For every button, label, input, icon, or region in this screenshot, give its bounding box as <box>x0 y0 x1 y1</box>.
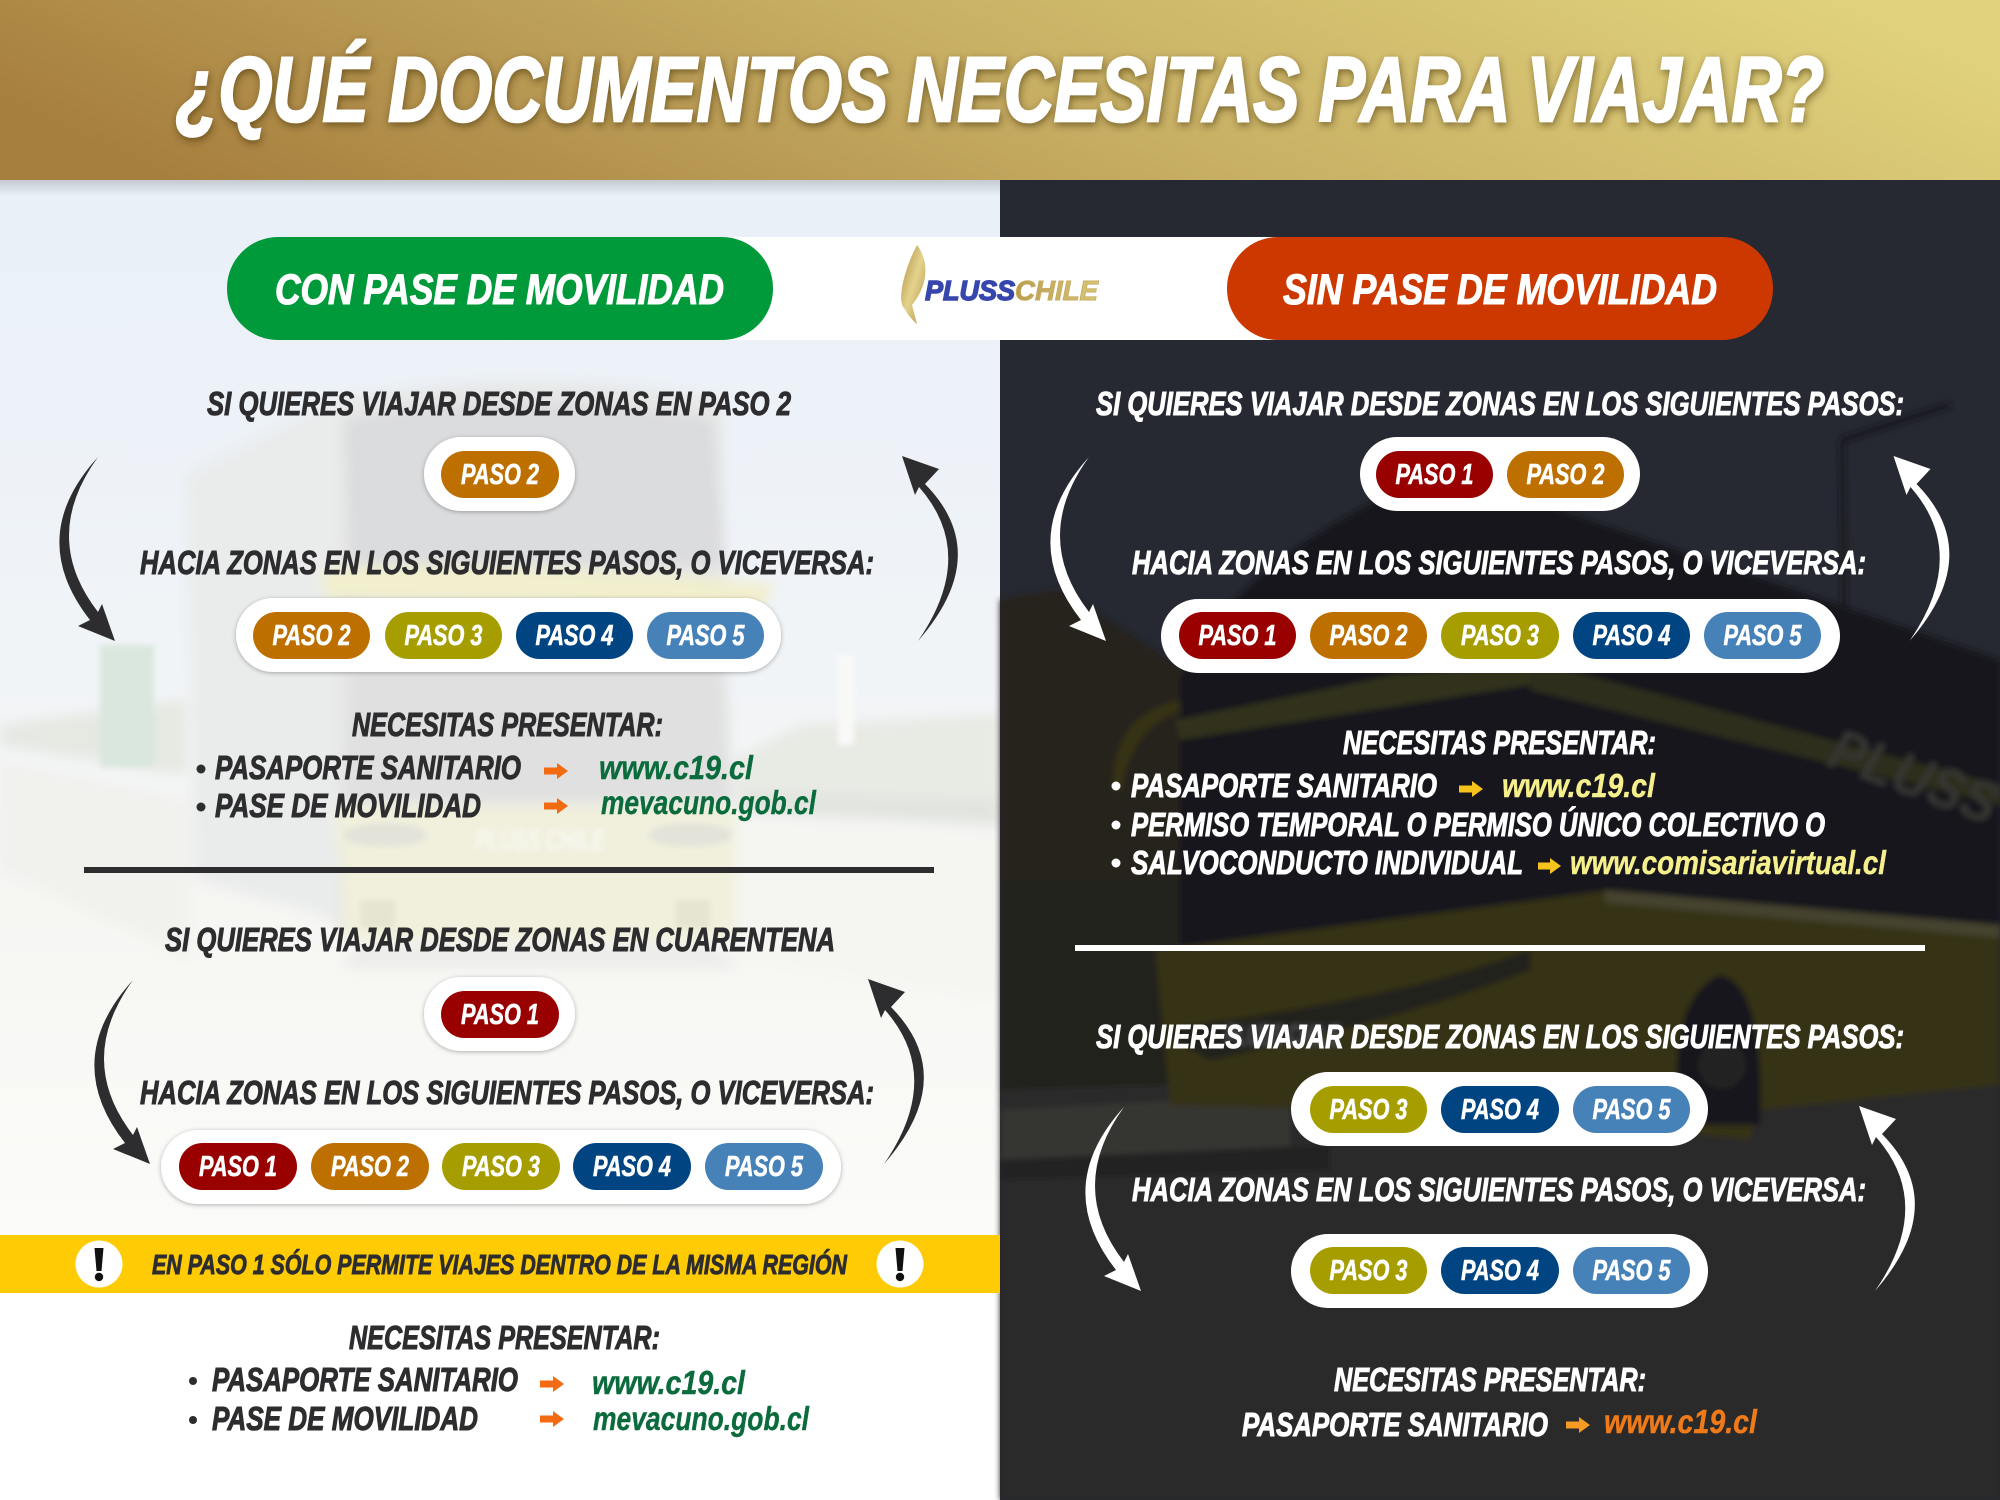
step group: paso 2: PASO 2 <box>461 459 539 491</box>
step group: paso 1 <box>424 977 575 1051</box>
step group: paso 2 <box>424 437 575 511</box>
step group: pasos 1 a 5: PASO 1 <box>1198 620 1276 652</box>
panel: left background photo: PLUSS CHILE <box>475 824 606 857</box>
step group: pasos 1 a 5 <box>161 1130 841 1204</box>
arrow: curved up <box>902 456 958 641</box>
document list: mevacuno.gob.cl <box>593 1400 810 1437</box>
panel: right background photo: PLUSS CHILE <box>1225 1019 1341 1052</box>
step group: pasos 1 a 5: PASO 4 <box>593 1151 671 1183</box>
step group: pasos 3 a 5 <box>1291 1072 1708 1146</box>
panel: con pase, lower section <box>94 921 924 1204</box>
divider right <box>1075 945 1925 951</box>
header band <box>0 0 2000 180</box>
warning band <box>0 1235 1000 1293</box>
arrow: curved down <box>94 980 150 1164</box>
green pill: con pase de movilidad <box>227 237 773 340</box>
document list: SALVOCONDUCTO INDIVIDUAL <box>1131 844 1523 881</box>
panel: sin pase, upper section <box>1050 385 1949 881</box>
step group: pasos 2 a 5: PASO 2 <box>272 620 350 652</box>
panel: con pase, upper section <box>59 385 958 824</box>
step group: pasos 2 a 5 <box>236 598 781 672</box>
document list: www.comisariavirtual.cl <box>1570 844 1887 881</box>
panel: sin pase, lower section <box>1085 1018 1915 1443</box>
document list: www.c19.cl <box>599 749 754 786</box>
logo: Pluss Chile: PLUSS <box>925 275 1015 306</box>
arrow: curved up <box>1894 456 1949 641</box>
step group: pasos 3 a 5: PASO 4 <box>1461 1255 1539 1287</box>
arrow: curved up <box>1859 1106 1915 1291</box>
icon: warning right <box>876 1240 924 1288</box>
logo: Pluss Chile <box>901 245 1099 324</box>
heading: necesitas presentar: NECESITAS PRESENTAR: <box>352 706 663 743</box>
step group: pasos 3 a 5: PASO 5 <box>1592 1094 1671 1126</box>
step group: pasos 2 a 5: PASO 5 <box>666 620 745 652</box>
document list: PASAPORTE SANITARIO <box>1131 767 1437 804</box>
arrow: curved down <box>1085 1107 1141 1291</box>
divider left <box>84 867 934 873</box>
step group: pasos 3 a 5: PASO 3 <box>1330 1094 1408 1126</box>
heading: hacia zonas: HACIA ZONAS EN LOS SIGUIENTES PASOS, O VICEVERSA: <box>140 544 874 581</box>
document list: mevacuno.gob.cl <box>601 784 817 821</box>
panel: con pase, requirements <box>189 1319 810 1437</box>
arrow: curved down <box>59 457 115 641</box>
heading: desde paso 2: SI QUIERES VIAJAR DESDE ZONAS EN PASO 2 <box>207 385 791 422</box>
step group: paso 1: PASO 1 <box>461 999 539 1031</box>
step group: pasos 1 y 2 <box>1360 437 1640 511</box>
document list <box>189 1361 810 1437</box>
top white band with logo <box>700 237 1300 340</box>
green pill: con pase de movilidad: CON PASE DE MOVILIDAD <box>275 266 724 314</box>
step group: pasos 1 a 5: PASO 4 <box>1592 620 1670 652</box>
document list: PERMISO TEMPORAL O PERMISO ÚNICO COLECTIVO O <box>1131 806 1825 843</box>
step group: pasos 1 a 5: PASO 3 <box>1461 620 1539 652</box>
document list: PASAPORTE SANITARIO <box>212 1361 518 1398</box>
heading: hacia zonas: HACIA ZONAS EN LOS SIGUIENTES PASOS, O VICEVERSA: <box>140 1074 874 1111</box>
document list: www.c19.cl <box>1502 767 1656 804</box>
heading: necesitas presentar: NECESITAS PRESENTAR: <box>1343 724 1656 761</box>
step group: pasos 2 a 5: PASO 4 <box>536 620 614 652</box>
heading: desde cuarentena: SI QUIERES VIAJAR DESDE ZONAS EN CUARENTENA <box>165 921 835 958</box>
step group: pasos 2 a 5: PASO 3 <box>404 620 482 652</box>
step group: pasos 1 a 5 <box>1161 599 1840 673</box>
warning text: EN PASO 1 SÓLO PERMITE VIAJES DENTRO DE LA MISMA REGIÓN <box>152 1249 848 1280</box>
step group: pasos 1 a 5: PASO 5 <box>1724 620 1802 652</box>
document line: PASAPORTE SANITARIO <box>1242 1406 1548 1443</box>
document list: www.c19.cl <box>592 1364 746 1401</box>
red pill: sin pase de movilidad <box>1227 237 1773 340</box>
heading: necesitas presentar: NECESITAS PRESENTAR: <box>349 1319 660 1356</box>
panel: left background photo <box>0 180 1000 1500</box>
red pill: sin pase de movilidad: SIN PASE DE MOVILIDAD <box>1283 266 1717 314</box>
step group: pasos 3 a 5: PASO 4 <box>1461 1094 1539 1126</box>
document list: PASE DE MOVILIDAD <box>215 787 481 824</box>
document list: PASE DE MOVILIDAD <box>212 1400 478 1437</box>
logo: Pluss Chile: CHILE <box>1015 275 1099 306</box>
step group: pasos 3 a 5: PASO 3 <box>1330 1255 1408 1287</box>
document list <box>1112 767 1887 881</box>
arrow: curved down <box>1050 457 1106 641</box>
document list: PASAPORTE SANITARIO <box>215 749 521 786</box>
document list <box>196 749 817 824</box>
document line: www.c19.cl <box>1604 1403 1758 1440</box>
step group: pasos 1 a 5: PASO 5 <box>725 1151 804 1183</box>
step group: pasos 1 a 5: PASO 2 <box>331 1151 409 1183</box>
step group: pasos 1 a 5: PASO 2 <box>1330 620 1408 652</box>
step group: pasos 1 a 5: PASO 1 <box>199 1151 277 1183</box>
panel: right background photo <box>1000 180 2000 1500</box>
step group: pasos 3 a 5 <box>1291 1234 1708 1308</box>
icon: warning left <box>76 1240 122 1288</box>
step group: pasos 1 y 2: PASO 2 <box>1526 459 1604 491</box>
step group: pasos 1 a 5: PASO 3 <box>462 1151 540 1183</box>
step group: pasos 3 a 5: PASO 5 <box>1592 1255 1671 1287</box>
heading: necesitas presentar: NECESITAS PRESENTAR: <box>1334 1361 1646 1398</box>
arrow: curved up <box>868 979 924 1164</box>
step group: pasos 1 y 2: PASO 1 <box>1396 459 1474 491</box>
